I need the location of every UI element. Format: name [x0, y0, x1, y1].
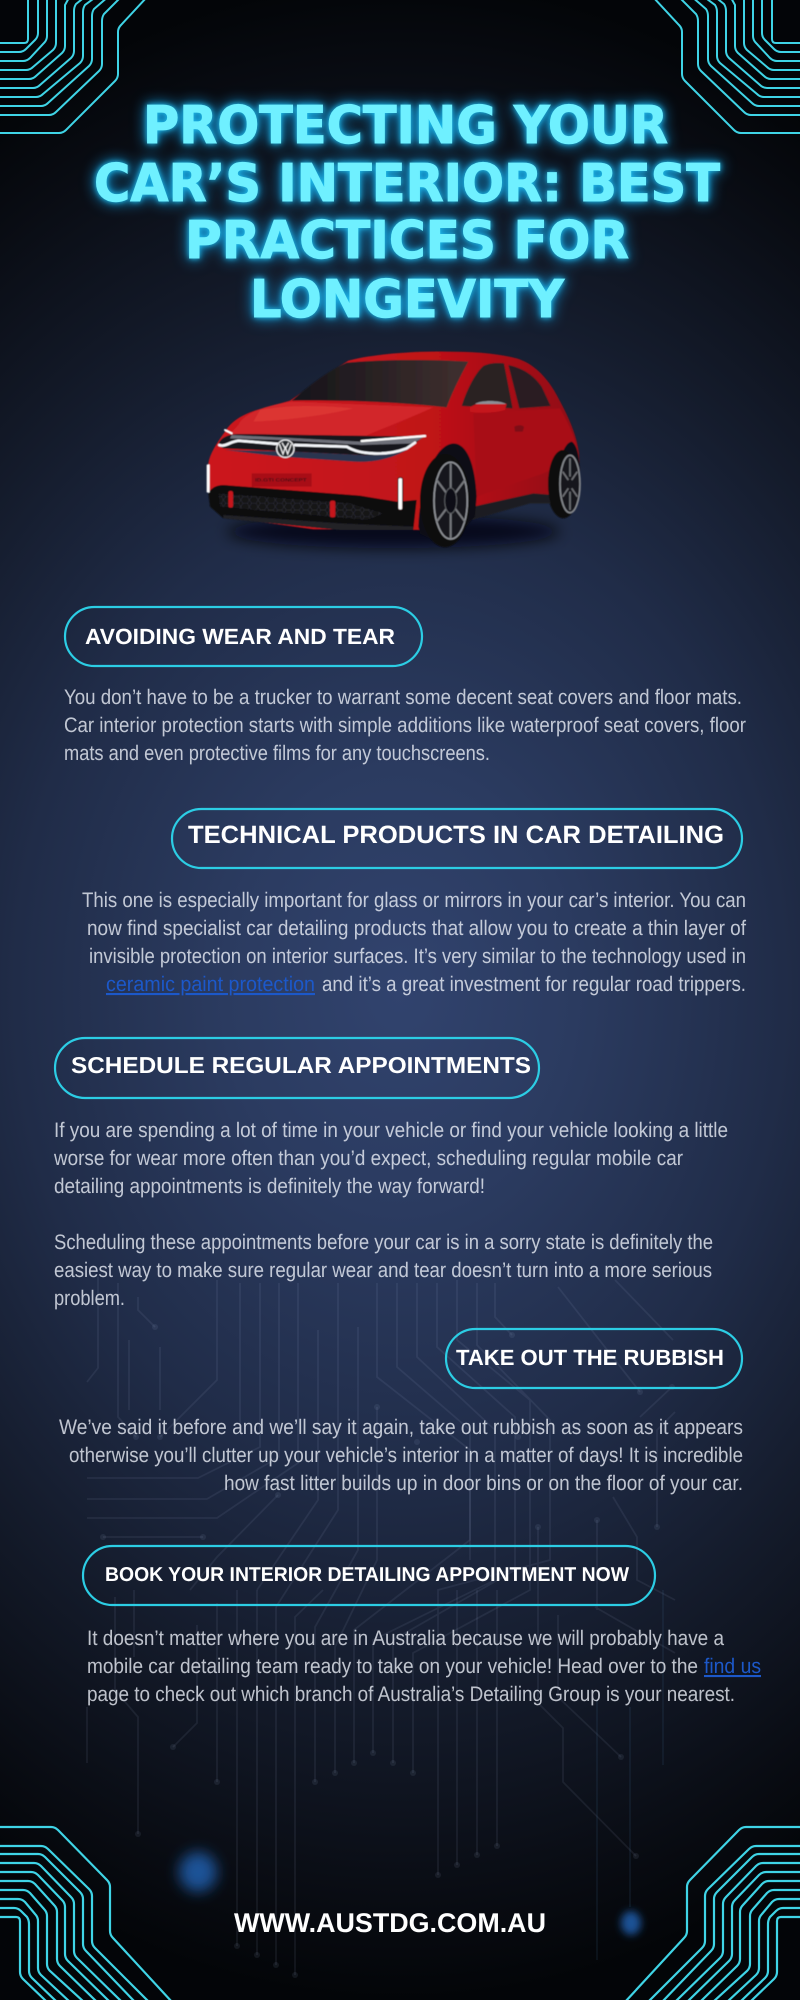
section 3 body text	[53, 1119, 728, 1310]
section 3 heading pill	[55, 1038, 539, 1098]
section 5 body text: find us	[704, 1655, 761, 1678]
section 5 body text: It doesn’t matter where you are in Australia because we will probably have a	[87, 1627, 724, 1650]
section 2 body text: and it’s a great investment for regular road trippers.	[322, 973, 746, 996]
section 1 heading pill: AVOIDING WEAR AND TEAR	[85, 624, 395, 649]
section 4 heading pill	[446, 1329, 742, 1388]
section 3 body text: detailing appointments is definitely the way forward!	[54, 1175, 485, 1198]
title: PROTECTING YOUR	[143, 96, 668, 156]
section 3 body text: problem.	[54, 1287, 125, 1310]
section 1 body text	[64, 686, 746, 765]
red car illustration: ID.GTI CONCEPT	[255, 477, 307, 483]
section 5 heading pill	[83, 1546, 655, 1605]
circuit board pattern	[87, 1277, 675, 1975]
section 3 body text: worse for wear more often than you’d expect, scheduling regular mobile car	[53, 1147, 683, 1170]
glow blob right	[621, 1911, 641, 1935]
section 3 heading pill: SCHEDULE REGULAR APPOINTMENTS	[71, 1052, 531, 1078]
section 4 body text	[59, 1416, 743, 1495]
section 2 heading pill	[172, 809, 742, 868]
corner lines bottom left	[0, 1827, 172, 2000]
circuit node dots	[100, 1324, 675, 1978]
section 2 body text: ceramic paint protection	[106, 973, 315, 996]
section 5 heading pill: BOOK YOUR INTERIOR DETAILING APPOINTMENT NOW	[105, 1564, 629, 1586]
section 4 heading pill: TAKE OUT THE RUBBISH	[456, 1345, 724, 1370]
section 3 body text: Scheduling these appointments before your car is in a sorry state is definitely the	[54, 1231, 713, 1254]
title: LONGEVITY	[250, 270, 565, 330]
corner lines top right	[653, 0, 800, 133]
section 2 body text: now find specialist car detailing products that allow you to create a thin layer of	[87, 917, 746, 940]
section 2 heading pill: TECHNICAL PRODUCTS IN CAR DETAILING	[188, 821, 724, 849]
section 5 body text: mobile car detailing team ready to take on your vehicle! Head over to the	[87, 1655, 698, 1678]
red car illustration	[206, 350, 582, 556]
corner lines top left	[0, 0, 147, 133]
corner lines bottom right	[625, 1827, 800, 2000]
section 1 body text: mats and even protective films for any touchscreens.	[64, 742, 490, 765]
section 5 body text	[87, 1627, 761, 1706]
footer website url: WWW.AUSTDG.COM.AU	[234, 1908, 546, 1938]
title: CAR’S INTERIOR: BEST	[94, 154, 720, 214]
title: PRACTICES FOR	[185, 211, 629, 271]
section 4 body text: how fast litter builds up in door bins or on the floor of your car.	[224, 1472, 743, 1495]
section 2 body text	[82, 889, 746, 996]
section 4 body text: We’ve said it before and we’ll say it again, take out rubbish as soon as it appears	[59, 1416, 743, 1439]
section 3 body text: If you are spending a lot of time in your vehicle or find your vehicle looking a little	[54, 1119, 728, 1142]
title	[94, 96, 720, 330]
section 5 body text: page to check out which branch of Australia’s Detailing Group is your nearest.	[87, 1683, 735, 1706]
section 1 heading pill	[65, 607, 422, 666]
glow blob left	[179, 1852, 217, 1892]
section 3 body text: easiest way to make sure regular wear and tear doesn’t turn into a more serious	[54, 1259, 712, 1282]
